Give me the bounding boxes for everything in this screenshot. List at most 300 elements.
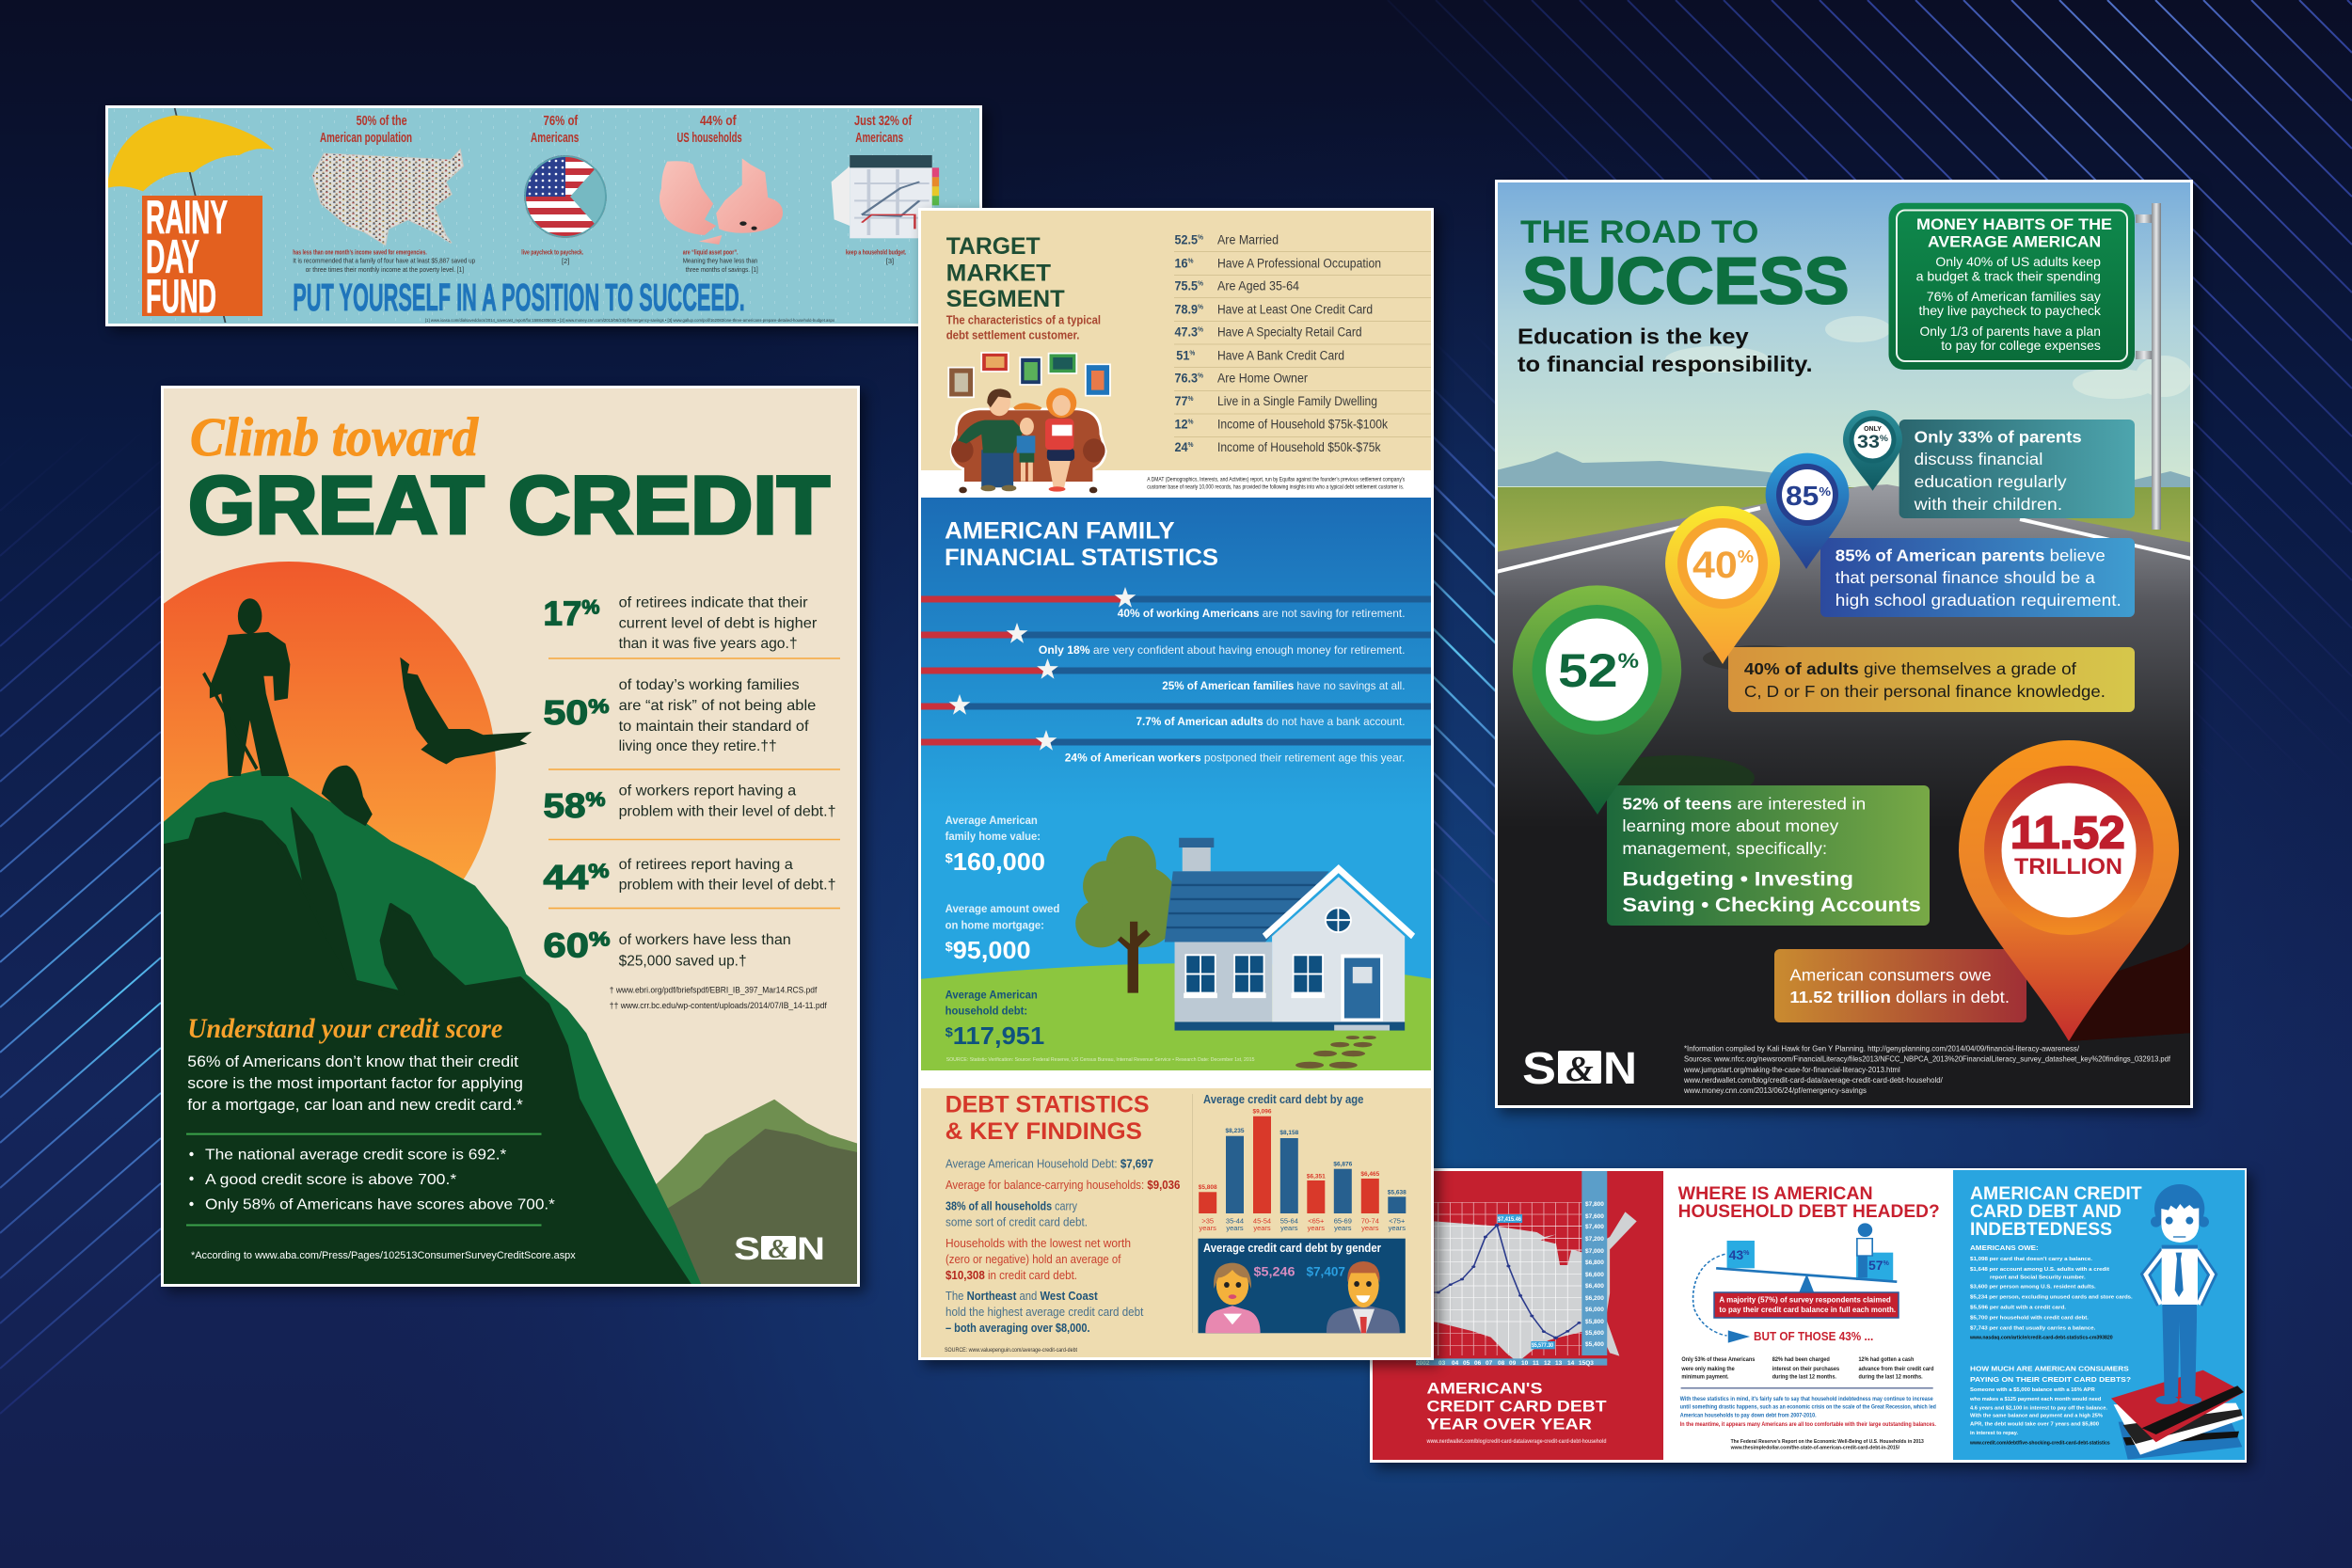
stat descriptions: of today’s working families [619, 677, 800, 693]
heading: credit card debt year over year: www.nerdwallet.com/blog/credit-card-data/average-credit-card-debt-household [1426, 1439, 1607, 1445]
bar chart: credit card debt by age: <65+ [1308, 1217, 1325, 1226]
callout: 40 percent: 40% of adults give themselves a grade of [1744, 659, 2076, 678]
heading [946, 1092, 1150, 1145]
list: customer characteristics: Have A Professional Occupation [1217, 256, 1381, 270]
heading: DEBT STATISTICS [946, 1092, 1150, 1118]
bar chart: credit card debt by age: years [1280, 1224, 1298, 1232]
footnote: DMAT report: customer base of nearly 10,000 records, has provided the following insights into who a typical debt settlement customer is. [1147, 485, 1405, 491]
bar chart: credit card debt by age [1193, 1093, 1406, 1333]
title block: rainy day fund [142, 191, 262, 323]
heading: target market segment [946, 233, 1101, 342]
stat list: 44 [544, 858, 581, 896]
bar chart: credit card debt by age: 35-44 [1226, 1217, 1244, 1226]
line chart over US map: $5,400 [1585, 1341, 1604, 1348]
bar chart: credit card debt by age: years [1308, 1224, 1325, 1232]
callout: 52 percent: learning more about money [1622, 816, 1838, 835]
stat: mortgage [946, 902, 1059, 964]
callout: 40 percent: C, D or F on their personal finance knowledge. [1744, 682, 2106, 701]
line chart over US map: 05 [1463, 1360, 1470, 1367]
text block: americans owe [1969, 1243, 2133, 1341]
road sign: money habits: a budget & track their spending [1916, 268, 2101, 283]
list: customer characteristics: % [1189, 350, 1196, 356]
line chart over US map: $5,800 [1585, 1319, 1604, 1325]
title block: rainy day fund: DAY [146, 230, 199, 283]
stat descriptions: to maintain their standard of [619, 719, 809, 735]
bar chart: credit card debt by age: 45-54 [1253, 1217, 1271, 1226]
heading: CARD DEBT AND [1970, 1202, 2122, 1222]
three breakdown columns: Only 53% of these Americans [1681, 1356, 1756, 1363]
line chart over US map: 14 [1567, 1360, 1575, 1367]
stat: mortgage: Average amount owed [946, 902, 1059, 915]
logo: S&N: N [1603, 1044, 1637, 1094]
line chart over US map: $7,800 [1585, 1201, 1604, 1208]
icon: broken piggy bank [660, 158, 783, 245]
callout: 52 percent: management, specifically: [1622, 839, 1827, 858]
text block: americans owe: $3,600 per person among U.S. resident adults. [1970, 1284, 2096, 1290]
bar chart: credit card debt by age: $8,235 [1226, 1128, 1245, 1134]
stat: home value [946, 814, 1045, 876]
stat: mortgage: 95,000 [953, 936, 1031, 964]
key findings text: SOURCE: www.valuepenguin.com/average-credit-card-debt [945, 1348, 1077, 1354]
text block: how much are consumers paying: who makes a $125 payment each month would need [1969, 1397, 2101, 1402]
footnotes [610, 986, 827, 1010]
conclusion paragraph: until something drastic happens, such as an economic crisis on the scale of the Great Recession, which led [1680, 1404, 1936, 1411]
key findings text: 38% of all households carry [946, 1200, 1078, 1213]
key findings text: Households with the lowest net worth [946, 1237, 1131, 1250]
footnote: DMAT report [1147, 478, 1405, 491]
line chart over US map: 06 [1474, 1360, 1482, 1367]
list: customer characteristics: % [1198, 304, 1204, 310]
stat sentences: 7.7% of American adults do not have a bank account. [1136, 715, 1406, 728]
heading: target market segment: debt settlement customer. [946, 328, 1080, 342]
footnotes: †† www.crr.bc.edu/wp-content/uploads/2014/07/IB_14-11.pdf [610, 1001, 827, 1010]
stat list: 50 [544, 693, 581, 732]
map pin: 52 percent: 52 [1558, 644, 1611, 697]
logo: S&N: & [1565, 1050, 1594, 1089]
callout: 52 percent [1607, 785, 1930, 926]
map pin: 11.52 trillion [1959, 740, 2179, 1041]
heading: FINANCIAL STATISTICS [945, 545, 1218, 571]
text block: americans owe: $5,234 per person, excluding unused cards and store cards. [1970, 1295, 2133, 1301]
stat descriptions: problem with their level of debt.† [619, 878, 835, 894]
stat headings: Americans [855, 130, 903, 146]
footnotes: † www.ebri.org/pdf/briefspdf/EBRI_IB_397_Mar14.RCS.pdf [610, 986, 818, 995]
list: customer characteristics: % [1188, 258, 1194, 264]
map pin: 11.52 trillion: TRILLION [2014, 854, 2122, 879]
text block: how much are consumers paying [1969, 1365, 2131, 1447]
stat descriptions: of retirees indicate that their [619, 595, 808, 611]
captions: It is recommended that a family of four have at least $5,887 saved up [293, 256, 475, 265]
callout: 11.52 trillion: 11.52 trillion dollars in debt. [1789, 988, 2010, 1006]
people speckle on map [313, 150, 463, 245]
map pin: 11.52 trillion: 11.52 [2010, 809, 2125, 859]
heading [1970, 1184, 2142, 1240]
subheading: but of those 43%: BUT OF THOSE 43% ... [1754, 1329, 1873, 1343]
text block: americans owe: $5,596 per adult with a credit card. [1970, 1306, 2067, 1311]
scene: sky, mountains, field and road [1496, 182, 2192, 1110]
heading: credit card debt year over year: AMERICAN'S [1426, 1380, 1543, 1398]
section: american family financial statistics [919, 498, 1434, 1074]
title block: rainy day fund: RAINY [146, 191, 228, 244]
text block: how much are consumers paying: 4.6 years and $2,100 in interest to pay off the balance. [1970, 1405, 2107, 1411]
bar chart: credit card debt by age: years [1361, 1224, 1379, 1232]
callout: 85 percent: 85% of American parents believe [1836, 546, 2106, 565]
bar chart: credit card debt by age: $6,351 [1307, 1173, 1326, 1180]
text block: how much are consumers paying: PAYING ON THEIR CREDIT CARD DEBTS? [1970, 1375, 2131, 1384]
list: customer characteristics: % [1188, 420, 1194, 426]
stat: home value: Average American [946, 814, 1038, 827]
list: customer characteristics: 24 [1174, 440, 1189, 454]
callout: majority pay in full [1714, 1292, 1899, 1318]
text block: how much are consumers paying: HOW MUCH ARE AMERICAN CONSUMERS [1970, 1365, 2129, 1373]
key findings text: Average American Household Debt: $7,697 [946, 1158, 1153, 1171]
line chart over US map: 11 [1533, 1360, 1539, 1367]
sources: *Information compiled by Kali Hawk for Gen Y Planning. http://genyplanning.com/2014/04/09/financial-literacy-awareness/ [1684, 1044, 2080, 1053]
list: customer characteristics: 47.3 [1174, 325, 1200, 340]
credit score section: for a mortgage, car loan and new credit card.* [187, 1096, 523, 1114]
logo: S&N [734, 1231, 825, 1267]
line chart over US map: 07 [1486, 1360, 1493, 1367]
line chart over US map: $6,400 [1585, 1283, 1604, 1290]
heading: credit card debt year over year: YEAR OVER YEAR [1426, 1415, 1592, 1433]
stat headings: US households [677, 130, 742, 146]
line chart over US map: $5,600 [1585, 1330, 1604, 1337]
line chart over US map: $6,200 [1585, 1295, 1604, 1302]
map pin: 33 percent [1843, 410, 1902, 491]
stat sentences: 40% of working Americans are not saving for retirement. [1118, 607, 1406, 620]
conclusion paragraph [1680, 1396, 1936, 1451]
captions: [3] [886, 257, 894, 265]
stat: household debt [946, 989, 1044, 1050]
three breakdown columns: advance from their credit card [1859, 1366, 1934, 1372]
stat: household debt: household debt: [946, 1005, 1027, 1018]
subheading: to financial responsibility. [1518, 352, 1813, 376]
sources [1683, 1044, 2171, 1095]
illustration: sun, mountain, hiker and eagle [164, 562, 857, 1284]
stat list: % [581, 596, 600, 618]
road sign: money habits: Only 1/3 of parents have a plan [1919, 324, 2101, 339]
list: customer characteristics: % [1188, 442, 1194, 449]
bar chart: credit card debt by age: <75+ [1389, 1217, 1406, 1226]
text block: americans owe: AMERICANS OWE: [1970, 1243, 2039, 1252]
panel: climb toward great credit [82, 386, 866, 1292]
key findings text: (zero or negative) hold an average of [946, 1253, 1121, 1266]
source line: [1] www.ioasa.com/dialsaveddocs/2014_savecast_report/for.15884305020 • [2] www.money.cnn.com/2013/06/24/pf/emergency-savings • [3] www.gallup.com/poll/162083/one-three-americans-prepare-detailed-household-budget.aspx [425, 318, 835, 323]
road sign: money habits: 76% of American families say [1927, 289, 2101, 304]
credit score section: Only 58% of Americans have scores above 700.* [205, 1197, 555, 1213]
list: customer characteristics: 78.9 [1174, 302, 1200, 316]
line chart over US map: $5,577.30 [1532, 1343, 1554, 1349]
line chart over US map: 04 [1452, 1360, 1459, 1367]
icon: yellow umbrella [106, 108, 274, 323]
list: customer characteristics: Live in a Single Family Dwelling [1217, 394, 1377, 408]
icon: US map of people [313, 150, 463, 245]
list: customer characteristics: % [1188, 396, 1194, 403]
three breakdown columns [1681, 1356, 1934, 1388]
callout: 33 percent: discuss financial [1915, 450, 2042, 468]
heading: Climb toward [190, 406, 479, 467]
panel: the road to success [1495, 180, 2199, 1114]
chart: credit card debt by gender [1199, 1239, 1406, 1333]
map pin: 85 percent [1766, 453, 1849, 569]
line chart over US map: $7,000 [1585, 1248, 1604, 1255]
sources: www.jumpstart.org/making-the-case-for-financial-literacy-2013.html [1683, 1065, 1900, 1074]
list: customer characteristics: 52.5 [1174, 232, 1200, 246]
stat: home value: 160,000 [953, 847, 1045, 876]
stat: home value: family home value: [946, 830, 1041, 843]
icon: seesaw with 43 and 57 percent: 43 [1729, 1247, 1743, 1262]
bar chart: credit card debt by age: years [1253, 1224, 1271, 1232]
road sign: money habits: they live paycheck to paycheck [1919, 303, 2102, 318]
callout: 33 percent [1899, 420, 2135, 518]
text block: americans owe: www.nasdaq.com/article/credit-card-debt-statistics-cm393820 [1969, 1336, 2113, 1341]
sources: www.money.cnn.com/2013/06/24/pf/emergency-savings [1683, 1085, 1867, 1095]
key findings text: $10,308 in credit card debt. [946, 1269, 1077, 1282]
line chart over US map: 03 [1438, 1360, 1446, 1367]
stat sentences: 25% of American families have no savings at all. [1162, 679, 1406, 692]
chart: credit card debt by gender: Average credit card debt by gender [1203, 1242, 1381, 1255]
callout: 52 percent: Budgeting • Investing [1622, 869, 1853, 891]
footnote: DMAT report: A DMAT (Demographics, Interests, and Activities) report, run by Equifax against the founder’s previous settlement company’s [1147, 478, 1405, 483]
list: customer characteristics: 12 [1174, 418, 1189, 432]
text block: how much are consumers paying: APR, the debt would take over 7 years and $5,800 [1970, 1422, 2099, 1428]
captions: live paycheck to paycheck. [521, 248, 583, 257]
icon: flag pie chart [524, 155, 607, 238]
line chart over US map: 2002 [1416, 1360, 1430, 1367]
stat descriptions [548, 595, 840, 969]
callout: 52 percent: 52% of teens are interested in [1622, 795, 1866, 814]
icon: seesaw with 43 and 57 percent [1693, 1223, 1897, 1343]
callout: 40 percent [1728, 647, 2135, 712]
progress stripes with stars [921, 587, 1431, 751]
bar chart: credit card debt by age: 65-69 [1334, 1217, 1352, 1226]
line chart over US map: $7,600 [1585, 1213, 1604, 1220]
stat sentences [1039, 607, 1406, 765]
key findings text [945, 1158, 1180, 1354]
title block: rainy day fund: FUND [146, 270, 216, 323]
stat: home value: $ [946, 850, 953, 865]
bar chart: credit card debt by age: 70-74 [1361, 1217, 1379, 1226]
stat list: % [588, 696, 610, 718]
list: customer characteristics: 76.3 [1174, 372, 1200, 386]
line chart over US map: 12 [1544, 1360, 1551, 1367]
three breakdown columns: interest on their purchases [1772, 1366, 1839, 1372]
sub-panel: american credit card debt and indebtedness [1953, 1170, 2245, 1460]
stat list: % [588, 861, 610, 882]
credit score section: A good credit score is above 700.* [205, 1172, 456, 1188]
logo: S&N: S [734, 1231, 760, 1267]
conclusion paragraph: With these statistics in mind, it's fairly safe to say that household indebtedness may continue to increase [1680, 1396, 1933, 1402]
chart: credit card debt by gender: $5,246 [1253, 1264, 1295, 1279]
stat list: 58 [544, 786, 581, 825]
stat headings [320, 113, 913, 146]
line chart over US map: 09 [1509, 1360, 1517, 1367]
list: customer characteristics: % [1198, 281, 1204, 288]
stat descriptions: $25,000 saved up.† [619, 953, 747, 969]
slogan: PUT YOURSELF IN A POSITION TO SUCCEED. [293, 276, 745, 319]
line chart over US map: $6,800 [1585, 1259, 1604, 1266]
panel: credit card debt triptych [1370, 1168, 2252, 1468]
callout: 85 percent: that personal finance should be a [1836, 568, 2095, 587]
three breakdown columns: during the last 12 months. [1772, 1374, 1836, 1381]
heading: target market segment: The characteristics of a typical [946, 312, 1101, 326]
text block: how much are consumers paying: www.credit.com/debt/five-shocking-credit-card-debt-statistics [1969, 1441, 2110, 1447]
stat: household debt: Average American [946, 989, 1038, 1002]
text block: americans owe: $5,700 per household with credit card debt. [1970, 1316, 2090, 1322]
map pin: 52 percent [1513, 585, 1681, 815]
bar chart: credit card debt by age: years [1226, 1224, 1244, 1232]
key findings text: The Northeast and West Coast [946, 1290, 1099, 1303]
conclusion paragraph: In the meantime, it appears many Americans are all too comfortable with their large outstanding balances. [1680, 1421, 1936, 1428]
heading: where is household debt headed [1678, 1184, 1940, 1222]
bar chart: credit card debt by age: years [1200, 1224, 1216, 1232]
heading: INDEBTEDNESS [1970, 1220, 2112, 1240]
icon: man on credit cards [2111, 1184, 2244, 1460]
section: debt statistics and key findings [921, 1088, 1431, 1357]
heading: target market segment: TARGET [946, 233, 1041, 260]
stat descriptions: current level of debt is higher [619, 615, 818, 632]
list: customer characteristics: % [1198, 327, 1204, 334]
bar chart: credit card debt by age: $5,638 [1388, 1190, 1406, 1196]
heading: the road to success: THE ROAD TO [1520, 214, 1759, 250]
stat descriptions: than it was five years ago.† [619, 636, 798, 652]
three breakdown columns: during the last 12 months. [1859, 1374, 1923, 1381]
stat descriptions: living once they retire.†† [619, 738, 777, 754]
key findings text: Average for balance-carrying households: $9,036 [946, 1179, 1180, 1192]
line chart over US map [1416, 1170, 1637, 1367]
map pin: 40 percent [1665, 506, 1780, 664]
source note: SOURCE: Statistic Verification: Source: Federal Reserve, US Census Bureau, Internal Revenue Service • Research Date: December 1st, 2015 [946, 1057, 1255, 1063]
stat headings: 50% of the [357, 113, 407, 129]
stat descriptions: of workers report having a [619, 784, 796, 800]
list: customer characteristics: % [1198, 373, 1204, 380]
subheading: Education is the key [1518, 325, 1749, 349]
map pin: 85 percent: % [1819, 484, 1831, 499]
stat list: 60 [544, 926, 581, 965]
stat headings: Just 32% of [854, 113, 913, 129]
road sign: money habits [1889, 203, 2161, 530]
bar chart: credit card debt by age: years [1334, 1224, 1352, 1232]
text block: americans owe: $1,098 per card that doesn't carry a balance. [1970, 1257, 2093, 1262]
icon: seesaw with 43 and 57 percent: 57 [1868, 1258, 1883, 1273]
bar chart: credit card debt by age: $6,465 [1360, 1171, 1380, 1178]
heading [188, 406, 830, 551]
road sign: money habits: Only 40% of US adults keep [1935, 254, 2101, 269]
callout: 85 percent [1820, 538, 2135, 617]
icon: calendar budget chart [832, 155, 939, 238]
heading: & KEY FINDINGS [946, 1118, 1142, 1145]
captions: has less than one month's income saved for emergencies. [293, 248, 427, 257]
captions: Meaning they have less than [683, 256, 757, 265]
callout: 33 percent: Only 33% of parents [1915, 428, 2082, 447]
line chart over US map: 10 [1521, 1360, 1529, 1367]
map pin: 33 percent: 33 [1857, 433, 1877, 452]
stat: mortgage: on home mortgage: [946, 919, 1044, 932]
map pin: 40 percent: % [1738, 547, 1754, 566]
heading: target market segment: MARKET [946, 260, 1051, 286]
bar chart: credit card debt by age: Average credit card debt by age [1203, 1093, 1363, 1106]
heading: AMERICAN FAMILY [945, 517, 1175, 544]
list: customer characteristics: 16 [1174, 256, 1189, 270]
heading: GREAT CREDIT [188, 460, 830, 551]
three breakdown columns: minimum payment. [1681, 1374, 1729, 1381]
icon: seesaw with 43 and 57 percent: % [1743, 1250, 1750, 1257]
illustration: house, tree and lawn [919, 836, 1434, 1074]
list: customer characteristics: Are Aged 35-64 [1217, 279, 1299, 293]
map pin: 40 percent: 40 [1692, 545, 1735, 586]
logo: S&N [1522, 1044, 1637, 1094]
credit score section: score is the most important factor for applying [187, 1074, 523, 1092]
road sign: money habits: to pay for college expenses [1941, 338, 2101, 353]
callout: 85 percent: high school graduation requirement. [1836, 591, 2122, 610]
line chart over US map: $6,000 [1585, 1307, 1604, 1313]
list: customer characteristics: Are Married [1217, 232, 1279, 246]
callout: 11.52 trillion: American consumers owe [1789, 966, 1992, 985]
sources: Sources: www.nfcc.org/newsroom/FinancialLiteracy/files2013/NFCC_NBPCA_2013%20FinancialLiteracy_survey_datasheet_key%20findings_032913.pdf [1684, 1054, 2171, 1064]
captions: three months of savings. [1] [686, 265, 758, 274]
stat headings: 76% of [544, 113, 579, 129]
bar chart: credit card debt by age: $5,808 [1199, 1184, 1217, 1191]
stat: mortgage: $ [946, 939, 953, 954]
callout: majority pay in full: to pay their credit card balance in full each month. [1719, 1306, 1896, 1314]
map pin: 52 percent: % [1618, 649, 1639, 673]
sources: www.nerdwallet.com/blog/credit-card-data/average-credit-card-debt-household/ [1683, 1075, 1943, 1085]
heading: the road to success [1520, 214, 1850, 318]
captions: are “liquid asset poor”. [683, 248, 738, 257]
credit score section: *According to www.aba.com/Press/Pages/102513ConsumerSurveyCreditScore.aspx [191, 1250, 576, 1261]
callout: 33 percent: with their children. [1914, 495, 2062, 514]
credit score section: 56% of Americans don’t know that their credit [187, 1053, 518, 1070]
stat descriptions: problem with their level of debt.† [619, 803, 835, 820]
heading: the road to success: SUCCESS [1522, 245, 1850, 318]
three breakdown columns: were only making the [1681, 1366, 1735, 1372]
logo: S&N: N [797, 1231, 825, 1267]
heading: where is household debt headed: WHERE IS AMERICAN [1678, 1184, 1873, 1204]
list: customer characteristics: 51 [1176, 348, 1190, 362]
bar chart: credit card debt by age: 55-64 [1280, 1217, 1298, 1226]
key findings text: some sort of credit card debt. [946, 1216, 1088, 1229]
text block: how much are consumers paying: With the same balance and payment and a high 25% [1970, 1413, 2103, 1418]
heading: credit card debt year over year: CREDIT CARD DEBT [1426, 1398, 1607, 1416]
heading: where is household debt headed: HOUSEHOLD DEBT HEADED? [1678, 1202, 1940, 1222]
key findings text: – both averaging over $8,000. [946, 1322, 1089, 1335]
list: customer characteristics: 77 [1174, 394, 1189, 408]
list: customer characteristics: Have A Bank Credit Card [1217, 348, 1344, 362]
stat sentences: 24% of American workers postponed their retirement age this year. [1065, 752, 1406, 765]
bar chart: credit card debt by age: $9,096 [1253, 1108, 1272, 1115]
stat headings: 44% of [700, 113, 737, 129]
subheading [1518, 325, 1813, 376]
heading: AMERICAN CREDIT [1970, 1184, 2142, 1204]
stat descriptions: of retirees report having a [619, 857, 793, 873]
heading: target market segment: SEGMENT [946, 286, 1065, 312]
stat: household debt: 117,951 [953, 1022, 1044, 1050]
credit score section: Understand your credit score [187, 1013, 502, 1044]
three breakdown columns: 12% had gotten a cash [1859, 1356, 1914, 1363]
stat sentences: Only 18% are very confident about having enough money for retirement. [1039, 643, 1406, 657]
conclusion paragraph: www.thesimpledollar.com/the-state-of-american-credit-card-debt-in-2015/ [1730, 1446, 1900, 1451]
map pin: 33 percent: ONLY [1864, 426, 1882, 433]
credit score section [186, 1013, 576, 1261]
stat: household debt: $ [946, 1024, 953, 1039]
captions: or three times their monthly income at the poverty level. [1] [306, 265, 464, 274]
stat list [544, 594, 611, 965]
callout: 52 percent: Saving • Checking Accounts [1622, 895, 1921, 916]
list: customer characteristics: 75.5 [1174, 279, 1200, 293]
list: customer characteristics [1174, 232, 1431, 454]
conclusion paragraph: American households to pay down debt from 2007-2010. [1680, 1413, 1817, 1419]
logo: S&N: & [769, 1235, 789, 1264]
